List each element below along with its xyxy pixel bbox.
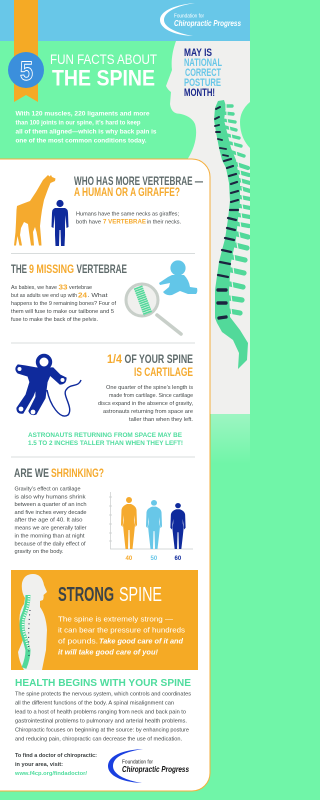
callout: May is national correct posture month <box>184 47 222 99</box>
text: strong spine: The spine is extremely strong — <box>58 614 174 624</box>
icon: magnifying glass with spine <box>126 284 181 334</box>
text: health: and reducing pain, chiropractic can decrease the use of medication. <box>15 736 182 742</box>
text: shrinking: between a quarter of an inch <box>14 502 86 508</box>
icon: astronaut <box>16 354 81 416</box>
intro text: With 120 muscles, 220 ligaments and more <box>16 110 150 118</box>
text: health: all the different functions of the body. A spinal misalignment can <box>15 701 174 707</box>
callout: astronauts taller: 1.5 TO 2 INCHES TALLER THAN WHEN THEY LEFT! <box>28 440 183 447</box>
neck background shape <box>240 102 250 148</box>
text: necks: in their necks. <box>147 220 181 226</box>
text: missing vertebrae <box>11 284 116 323</box>
text: health: lead to a host of health problems ranging from neck and back pain to <box>15 710 186 716</box>
text: strong spine: of pounds. <box>58 636 98 646</box>
text: strong spine: it can bear the pressure of hundreds <box>58 626 185 634</box>
title: THE SPINE <box>52 66 155 90</box>
heading: strong spine: SPINE <box>119 584 162 606</box>
text: health: Chiropractic focuses on beginning at the source: by enhancing posture <box>15 728 189 734</box>
callout: May is national correct posture month: MONTH! <box>184 87 215 99</box>
callout: May is national correct posture month: CORRECT <box>185 67 221 79</box>
heading: shrinking: ARE WE <box>14 466 49 480</box>
text: cartilage: discs expand in the absence of gravity, <box>98 401 193 407</box>
heading: health: HEALTH BEGINS WITH YOUR SPINE <box>15 677 191 689</box>
chart: height by age <box>109 492 193 562</box>
heading: human or giraffe <box>74 174 203 199</box>
heading: cartilage <box>107 352 193 379</box>
text: shrinking: and five inches every decade <box>14 510 86 516</box>
text: shrinking: in the morning than at night <box>14 534 85 540</box>
heading: strong spine: STRONG <box>58 584 114 606</box>
text: missing vertebrae: . What <box>88 293 108 299</box>
logo: bottom: Foundation for <box>122 760 153 766</box>
heading: 9 missing vertebrae: VERTEBRAE <box>76 262 127 276</box>
callout: astronauts taller: ASTRONAUTS RETURNING FROM SPACE MAY BE <box>28 432 182 439</box>
axis labels: 60 <box>174 556 182 562</box>
text: health: The spine protects the nervous system, which controls and coordinates <box>15 692 191 698</box>
text: shrinking: means we are generally taller <box>14 526 87 532</box>
text: necks: both have <box>76 220 101 226</box>
callout: May is national correct posture month: MAY IS <box>184 47 212 59</box>
text: shrinking: gravity on the body. <box>14 549 64 555</box>
text: cartilage: taller than when they left. <box>129 417 193 423</box>
text: shrinking <box>14 487 87 555</box>
logo: top <box>160 3 241 36</box>
text: find a doctor: www.f4cp.org/findadoctor/ <box>14 771 87 777</box>
number badge: 5 <box>20 56 33 86</box>
title: FUN FACTS ABOUT <box>50 51 157 67</box>
heading: 9 missing vertebrae: THE <box>11 262 27 276</box>
icon: small spine <box>22 595 30 668</box>
text: cartilage: One quarter of the spine’s length is <box>106 385 193 391</box>
axis labels: 40 <box>126 556 133 562</box>
title <box>50 51 157 90</box>
heading: cartilage: 1/4 <box>107 352 122 366</box>
logo: bottom <box>108 749 189 783</box>
text: health: gastrointestinal problems to pulmonary and arterial health problems. <box>15 719 187 725</box>
callout: May is national correct posture month: POSTURE <box>184 77 221 89</box>
text: missing vertebrae: but as adults we end up with <box>11 293 77 299</box>
text: missing vertebrae: vertebrae <box>69 285 92 291</box>
text: find a doctor <box>14 753 97 777</box>
panel: strong spine <box>11 570 198 670</box>
figure: age 60 <box>170 503 186 549</box>
intro text: than 100 joints in our spine, it’s hard to keep <box>16 120 141 126</box>
text: missing vertebrae: As babies, we have <box>11 285 57 291</box>
text: shrinking: is also why humans shrink <box>14 494 86 500</box>
text: shrinking: Gravity’s effect on cartilage <box>14 487 80 493</box>
text: strong spine <box>58 614 185 656</box>
figure: age 40 <box>121 497 137 549</box>
text: find a doctor: in your area, visit: <box>15 762 63 768</box>
heading: human or giraffe: A HUMAN OR A GIRAFFE? <box>74 185 180 199</box>
text: missing vertebrae: 24 <box>78 292 87 300</box>
text: missing vertebrae: happens to the 9 remaining bones? Four of <box>11 301 116 307</box>
text: necks <box>76 212 181 226</box>
text: necks: 7 VERTEBRAE <box>103 219 147 226</box>
text: shrinking: because of the daily effect of <box>14 541 86 547</box>
icon: giraffe <box>14 175 56 246</box>
number badge <box>8 52 44 88</box>
intro text: one of the most common conditions today. <box>16 138 147 144</box>
text: cartilage: made from cartilage. Since cartilage <box>109 393 193 399</box>
head silhouette <box>166 41 250 414</box>
callout: astronauts taller <box>28 432 183 447</box>
callout: May is national correct posture month: NATIONAL <box>184 57 222 69</box>
heading: shrinking <box>14 466 104 480</box>
ribbon <box>14 0 38 102</box>
logo: top: Foundation for <box>174 14 204 20</box>
background: header band <box>0 0 250 41</box>
icon: human <box>52 200 68 246</box>
text: missing vertebrae: them will fuse to make our tailbone and 5 <box>11 309 114 315</box>
heading: shrinking: SHRINKING? <box>51 466 104 480</box>
icon: body silhouette <box>18 574 47 670</box>
text: find a doctor: To find a doctor of chiropractic: <box>15 753 97 759</box>
text: cartilage <box>98 385 193 423</box>
heading: 9 missing vertebrae <box>11 262 127 276</box>
intro text <box>16 110 157 144</box>
heading: cartilage: IS CARTILAGE <box>134 365 193 379</box>
logo: bottom: Chiropractic Progress <box>122 764 189 774</box>
text: health <box>15 692 191 742</box>
icon: baby <box>159 260 197 295</box>
intro text: all of them aligned—which is why back pain is <box>16 128 157 136</box>
axis labels <box>126 556 182 562</box>
text: cartilage: astronauts returning from space are <box>103 409 193 415</box>
text: necks: Humans have the same necks as giraffes; <box>76 212 179 218</box>
spine illustration <box>214 100 250 369</box>
text: shrinking: after the age of 40. It also <box>14 518 82 524</box>
background: green field <box>0 41 250 800</box>
heading: cartilage: OF YOUR SPINE <box>124 352 193 366</box>
text: strong spine: it will take good care of you! <box>58 648 158 656</box>
text: strong spine: Take good care of it and <box>99 636 183 646</box>
lower fade <box>211 414 250 464</box>
text: missing vertebrae: fuse to make the back of the pelvis. <box>11 317 98 323</box>
panel: main card <box>0 159 210 791</box>
figure: age 50 <box>146 500 162 549</box>
text: missing vertebrae: 33 <box>58 284 68 292</box>
heading: 9 missing vertebrae: 9 MISSING <box>29 262 74 276</box>
axis labels: 50 <box>150 556 158 562</box>
